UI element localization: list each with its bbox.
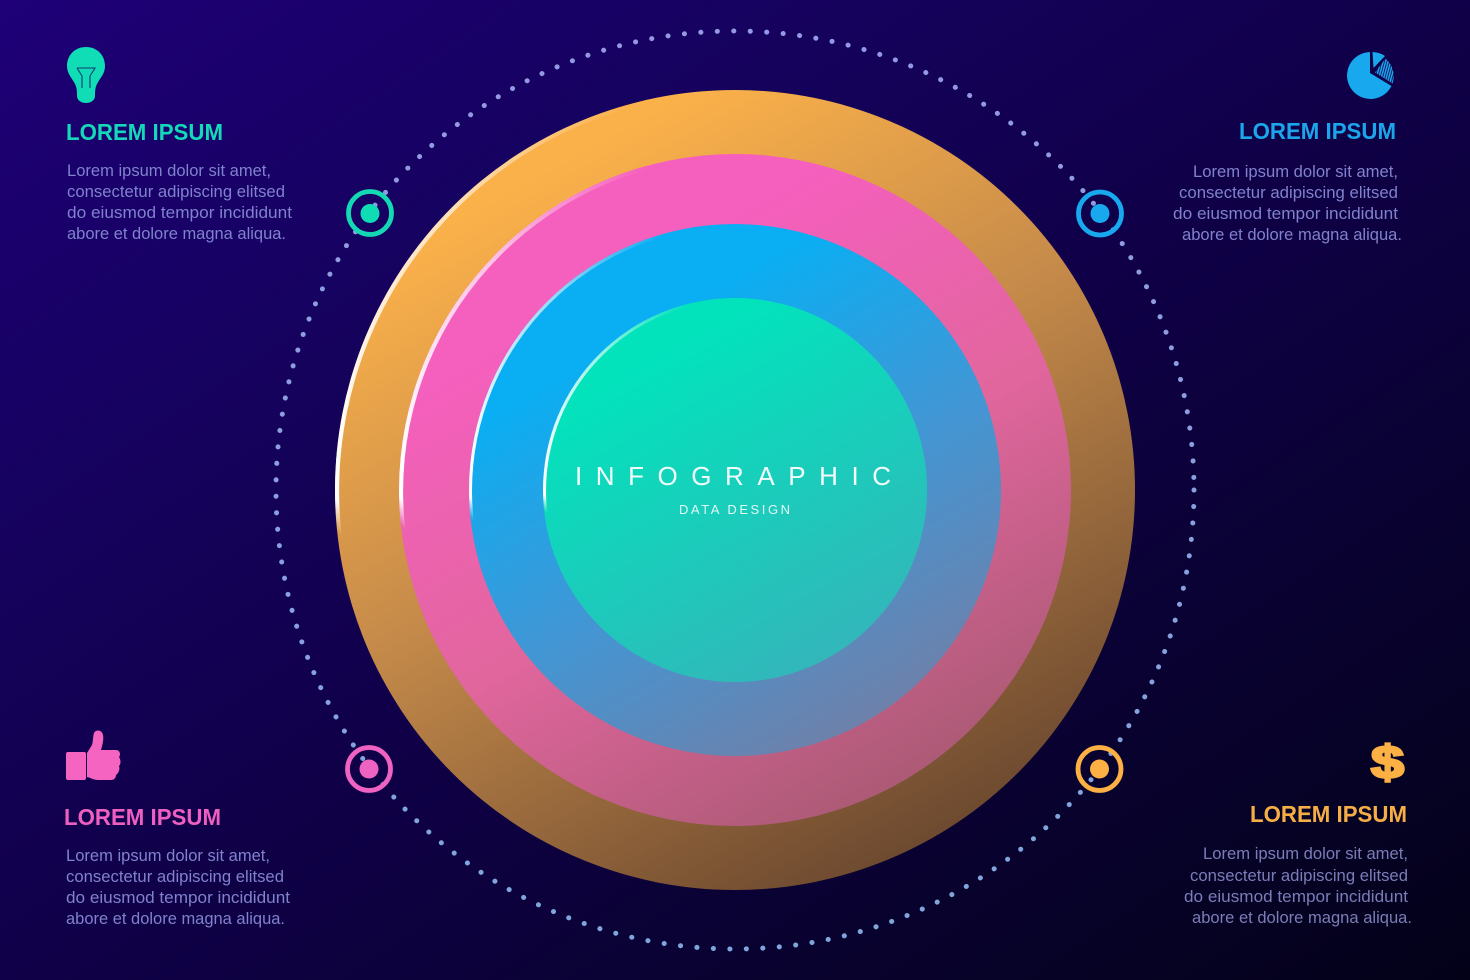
icon: light bulb [67, 47, 105, 103]
dotted orbit ring [276, 31, 1194, 949]
icon: pie chart [1347, 52, 1394, 99]
body text: consectetur adipiscing elitsed [67, 183, 285, 201]
circle: blue [469, 224, 1001, 756]
body text: abore et dolore magna aliqua. [1192, 909, 1412, 927]
subtitle text: DATA DESIGN [679, 502, 790, 517]
body text: do eiusmod tempor incididunt [67, 204, 292, 222]
body text: do eiusmod tempor incididunt [66, 889, 290, 907]
body text: consectetur adipiscing elitsed [1179, 184, 1398, 202]
body text: Lorem ipsum dolor sit amet, [66, 847, 270, 865]
panel: bottom left [64, 731, 290, 928]
title text: INFOGRAPHIC [575, 461, 891, 491]
body text [67, 162, 292, 243]
icon: thumbs up [66, 731, 120, 780]
body text [66, 847, 290, 928]
circle: green core [543, 298, 927, 682]
body text: Lorem ipsum dolor sit amet, [1193, 163, 1398, 181]
node: orange [1078, 748, 1121, 790]
node: pink [348, 748, 390, 790]
heading: LOREM IPSUM [66, 119, 223, 145]
body text [1184, 845, 1412, 927]
body text: abore et dolore magna aliqua. [67, 225, 286, 243]
heading: LOREM IPSUM [1239, 118, 1396, 144]
body text: abore et dolore magna aliqua. [66, 910, 285, 928]
body text: Lorem ipsum dolor sit amet, [67, 162, 271, 180]
heading: LOREM IPSUM [1250, 801, 1407, 827]
circle: orange outer [335, 90, 1135, 890]
body text: consectetur adipiscing elitsed [66, 868, 284, 886]
body text: do eiusmod tempor incididunt [1184, 888, 1408, 906]
node: blue [1078, 192, 1122, 235]
body text: do eiusmod tempor incididunt [1173, 205, 1398, 223]
icon: dollar sign: $ [1371, 736, 1404, 788]
panel: bottom right [1184, 736, 1412, 927]
body text: abore et dolore magna aliqua. [1182, 226, 1402, 244]
concentric circles [335, 90, 1135, 890]
body text: consectetur adipiscing elitsed [1190, 867, 1408, 885]
node: green [348, 192, 392, 234]
panel: top left [66, 47, 292, 243]
heading: LOREM IPSUM [64, 804, 221, 830]
circle: pink [399, 154, 1071, 826]
center title [575, 461, 891, 517]
body text [1173, 163, 1402, 244]
panel: top right [1173, 52, 1402, 244]
body text: Lorem ipsum dolor sit amet, [1203, 845, 1408, 863]
